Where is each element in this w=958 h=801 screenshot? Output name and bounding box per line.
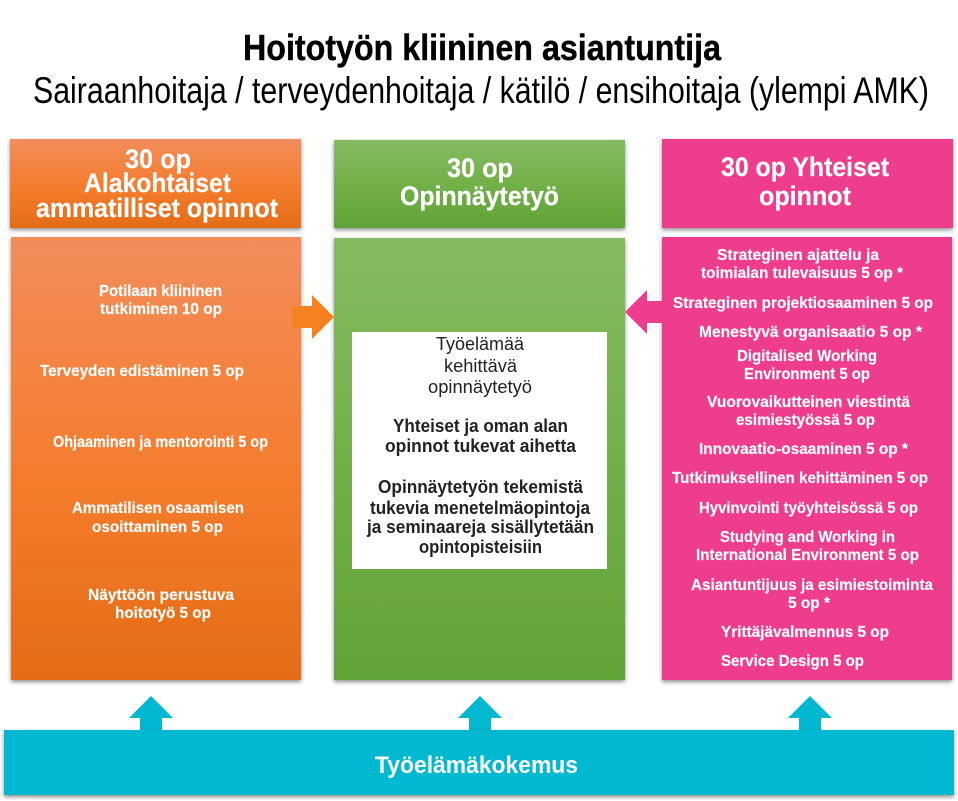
panel: pink header: opinnot <box>759 181 851 211</box>
panel: pink courses: International Environment 5 op <box>696 547 919 564</box>
panel: pink courses: Menestyvä organisaatio 5 op * <box>699 324 923 341</box>
white text box: Opinnäytetyön tekemistä <box>378 477 584 497</box>
white text box: opinnot tukevat aihetta <box>385 436 577 456</box>
panel: pink courses: Service Design 5 op <box>721 653 864 670</box>
panel: pink courses: Tutkimuksellinen kehittäminen 5 op <box>672 470 928 487</box>
arrow: work experience to green <box>458 696 502 731</box>
panel: orange courses: hoitotyö 5 op <box>115 605 211 622</box>
white text box: Työelämää <box>436 334 525 354</box>
panel: orange courses: osoittaminen 5 op <box>92 519 223 536</box>
panel: work experience bar <box>4 730 954 795</box>
panel: orange courses <box>11 237 301 680</box>
panel: pink courses: Yrittäjävalmennus 5 op <box>721 624 889 641</box>
panel: orange header: 30 op <box>125 144 191 174</box>
panel: pink header <box>662 139 953 228</box>
panel: green header: Opinnäytetyö <box>400 181 559 211</box>
white text box: tukevia menetelmäopintoja <box>370 498 591 518</box>
panel: pink courses: Vuorovaikutteinen viestintä <box>707 394 910 411</box>
panel: orange header: ammatilliset opinnot <box>36 193 278 223</box>
panel: green header <box>334 140 625 228</box>
panel: pink courses: Environment 5 op <box>744 366 870 383</box>
panel: pink courses: Strateginen projektiosaaminen 5 op <box>673 295 933 312</box>
panel: orange header: Alakohtaiset <box>84 168 231 198</box>
white text box: ja seminaareja sisällytetään <box>366 517 594 537</box>
arrow: work experience to pink <box>788 696 832 731</box>
panel: pink courses: Asiantuntijuus ja esimiestoiminta <box>691 577 933 594</box>
panel: orange courses: Potilaan kliininen <box>99 283 222 300</box>
panel: pink header: 30 op Yhteiset <box>721 152 889 182</box>
panel: pink courses: Innovaatio-osaaminen 5 op * <box>699 441 909 458</box>
white text box: Yhteiset ja oman alan <box>393 416 568 436</box>
panel: green header: 30 op <box>447 153 513 183</box>
white text box: opintopisteisiin <box>419 537 542 557</box>
panel: orange courses: Näyttöön perustuva <box>88 587 234 604</box>
panel: pink courses <box>662 237 952 680</box>
arrow: pink to thesis <box>625 290 662 334</box>
panel: orange courses: Ohjaaminen ja mentorointi 5 op <box>53 434 268 451</box>
arrow: orange to thesis <box>292 295 334 339</box>
panel: pink courses: 5 op * <box>788 595 831 612</box>
arrow: work experience to orange <box>129 696 173 731</box>
panel: orange courses: Ammatilisen osaamisen <box>72 500 244 517</box>
white text box: opinnäytetyö <box>428 377 532 397</box>
panel: orange courses: Terveyden edistäminen 5 op <box>40 363 244 380</box>
title <box>33 27 929 111</box>
panel: orange courses: tutkiminen 10 op <box>100 301 222 318</box>
panel: pink courses: Studying and Working in <box>720 529 895 546</box>
panel: pink courses: Hyvinvointi työyhteisössä 5 op <box>699 500 918 517</box>
panel: green thesis <box>334 238 625 680</box>
panel: work experience bar: Työelämäkokemus <box>375 752 578 779</box>
white text box: kehittävä <box>444 356 518 376</box>
panel: pink courses: toimialan tulevaisuus 5 op * <box>701 265 904 282</box>
panel: pink courses: Strateginen ajattelu ja <box>717 247 879 264</box>
white text box <box>352 332 607 569</box>
panel: orange header <box>10 139 301 228</box>
panel: pink courses: Digitalised Working <box>737 348 877 365</box>
panel: pink courses: esimiestyössä 5 op <box>736 412 875 429</box>
title: Hoitotyön kliininen asiantuntija <box>243 27 722 68</box>
